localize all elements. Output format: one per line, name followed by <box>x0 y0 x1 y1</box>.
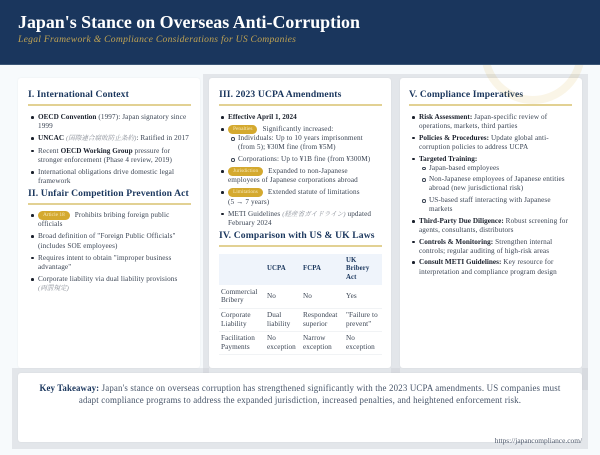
heading: compliance imperatives: V. Compliance Imperatives <box>409 89 523 100</box>
comparison table: UK <box>346 257 356 264</box>
comparison table: Corporate <box>221 311 251 319</box>
list: amendments: Significantly increased: <box>262 125 333 133</box>
heading: international context <box>28 89 191 106</box>
key takeaway text <box>39 383 561 405</box>
list: amendments <box>221 113 371 227</box>
list: unfair competition: Broad definition of "Foreign Public Officials" <box>38 232 176 240</box>
list: compliance imperatives <box>412 113 568 276</box>
list: unfair competition: (includes SOE employees) <box>38 242 118 250</box>
comparison table: No <box>267 292 276 300</box>
list: unfair competition: Corporate liability via dual liability provisions <box>38 275 177 283</box>
comparison table: superior <box>303 320 327 328</box>
list: amendments: Limitations <box>233 189 258 195</box>
list: compliance imperatives: controls; regular auditing of high-risk areas <box>419 247 549 255</box>
comparison table <box>219 254 382 355</box>
list: international context: framework <box>38 177 71 185</box>
heading: 2023 amendments <box>219 89 382 106</box>
list: unfair competition <box>31 211 177 292</box>
list: compliance imperatives: agents, consultants, distributors <box>419 226 514 234</box>
list: amendments: Corporations: Up to ¥1B fine (from ¥300M) <box>238 155 370 163</box>
list: compliance imperatives: markets <box>429 205 453 213</box>
comparison table: UCPA <box>267 265 286 272</box>
list: amendments: (5 → 7 years) <box>228 198 269 206</box>
list: unfair competition: officials <box>38 220 62 228</box>
comparison table: Payments <box>221 342 250 350</box>
list: international context: OECD Convention (1997): Japan signatory since <box>38 113 186 121</box>
frame overlap centre <box>391 368 400 373</box>
comparison table: Yes <box>346 292 357 300</box>
list: compliance imperatives: Non-Japanese employees of Japanese entities <box>429 175 565 183</box>
heading: international context: I. International Context <box>28 89 129 100</box>
subtitle: Legal Framework & Compliance Considerations for US Companies <box>18 34 296 45</box>
list: compliance imperatives: interpretation and compliance program design <box>419 268 557 276</box>
panel: column 3 <box>400 78 582 368</box>
list: international context: UNCAC (国際連合腐敗防止条約): Ratified in 2017 <box>38 134 189 142</box>
list: amendments: Extended statute of limitations <box>268 188 360 196</box>
panel: column 1 <box>18 78 200 368</box>
comparison table: No <box>346 334 355 342</box>
list: compliance imperatives: US-based staff interacting with Japanese <box>429 196 551 204</box>
key takeaway text: Key Takeaway: Japan's stance on overseas corruption has strengthened significantly with the 2023 UCPA amendments. US companies must <box>39 383 561 393</box>
list: amendments: Individuals: Up to 10 years imprisonment <box>238 134 363 142</box>
decorative gold ring <box>481 0 585 104</box>
heading: compliance imperatives <box>409 89 572 106</box>
list: amendments: employees of Japanese corporations abroad <box>228 176 358 184</box>
list: compliance imperatives: Risk Assessment: Japan-specific review of <box>419 113 547 121</box>
frame overlap strips <box>203 368 209 373</box>
list: compliance imperatives: Controls & Monitoring: Strengthen internal <box>419 238 552 246</box>
list: unfair competition: Prohibits bribing foreign public <box>75 211 169 219</box>
header banner <box>0 0 600 65</box>
heading: unfair competition: II. Unfair Competition Prevention Act <box>28 188 189 199</box>
comparison table: Dual <box>267 311 281 319</box>
comparison table: Commercial <box>221 288 258 296</box>
list: unfair competition: Article 18 <box>43 212 65 218</box>
list: compliance imperatives: operations, markets, third parties <box>419 122 518 130</box>
key takeaway text: adapt compliance programs to address the expanded jurisdiction, increased penalties, and heightened enforcement risk. <box>79 395 521 405</box>
comparison table: Bribery <box>346 265 369 272</box>
comparison table: Liability <box>221 320 247 328</box>
list: amendments: Penalties <box>233 126 252 132</box>
source url: https://japancompliance.com/ <box>495 436 582 445</box>
list: compliance imperatives: Third-Party Due Diligence: Robust screening for <box>419 217 568 225</box>
list: amendments: METI Guidelines (経産省ガイドライン) updated <box>228 210 371 218</box>
comparison table: liability <box>267 320 290 328</box>
list: amendments: Expanded to non-Japanese <box>268 167 348 175</box>
takeaway frame <box>12 368 588 449</box>
list: international context: International obligations drive domestic legal <box>38 168 174 176</box>
comparison table: No <box>267 334 276 342</box>
list: compliance imperatives: Consult METI Guidelines: Key resource for <box>419 258 554 266</box>
comparison table: exception <box>267 342 296 350</box>
list: international context: 1999 <box>38 122 53 130</box>
frame overlap right <box>582 368 588 390</box>
list: amendments: (from 5); ¥30M fine (from ¥5M) <box>238 143 336 151</box>
comparison table: Bribery <box>221 296 244 304</box>
comparison table: Respondeat <box>303 311 338 319</box>
list: amendments: Jurisdiction <box>233 168 258 174</box>
list: compliance imperatives: abroad (new jurisdictional risk) <box>429 184 523 192</box>
list: unfair competition: advantage" <box>38 263 71 271</box>
list: amendments: February 2024 <box>228 219 272 227</box>
panel: key takeaway <box>18 373 582 442</box>
list: unfair competition: (両罰規定) <box>38 285 69 292</box>
heading: 2023 amendments: III. 2023 UCPA Amendments <box>219 89 341 100</box>
list: international context <box>31 113 189 185</box>
comparison table: Narrow <box>303 334 326 342</box>
list: international context: Recent OECD Working Group pressure for <box>38 147 170 155</box>
list: international context: stronger enforcement (Phase 4 review, 2019) <box>38 156 172 164</box>
list: compliance imperatives: Policies & Procedures: Update global anti- <box>419 134 549 142</box>
list: amendments: Effective April 1, 2024 <box>228 113 297 121</box>
list: compliance imperatives: corruption policies to address UCPA <box>419 143 528 151</box>
list: compliance imperatives: Japan-based employees <box>429 164 499 172</box>
heading: comparison: IV. Comparison with US & UK Laws <box>219 230 375 241</box>
comparison table: "Failure to <box>346 311 378 319</box>
comparison table: Act <box>346 274 356 281</box>
comparison table: prevent" <box>346 320 371 328</box>
comparison table: exception <box>346 342 375 350</box>
gray panel frames <box>203 74 588 369</box>
list: compliance imperatives: Targeted Training: <box>419 155 477 163</box>
comparison table: No <box>303 292 312 300</box>
heading: unfair competition <box>28 188 191 205</box>
title: Japan's Stance on Overseas Anti-Corruption <box>18 12 360 32</box>
comparison table: FCPA <box>303 265 321 272</box>
heading: comparison <box>219 230 382 247</box>
comparison table: Facilitation <box>221 334 255 342</box>
list: unfair competition: Requires intent to obtain "improper business <box>38 254 171 262</box>
panel: column 2 <box>209 78 391 368</box>
comparison table: exception <box>303 342 332 350</box>
